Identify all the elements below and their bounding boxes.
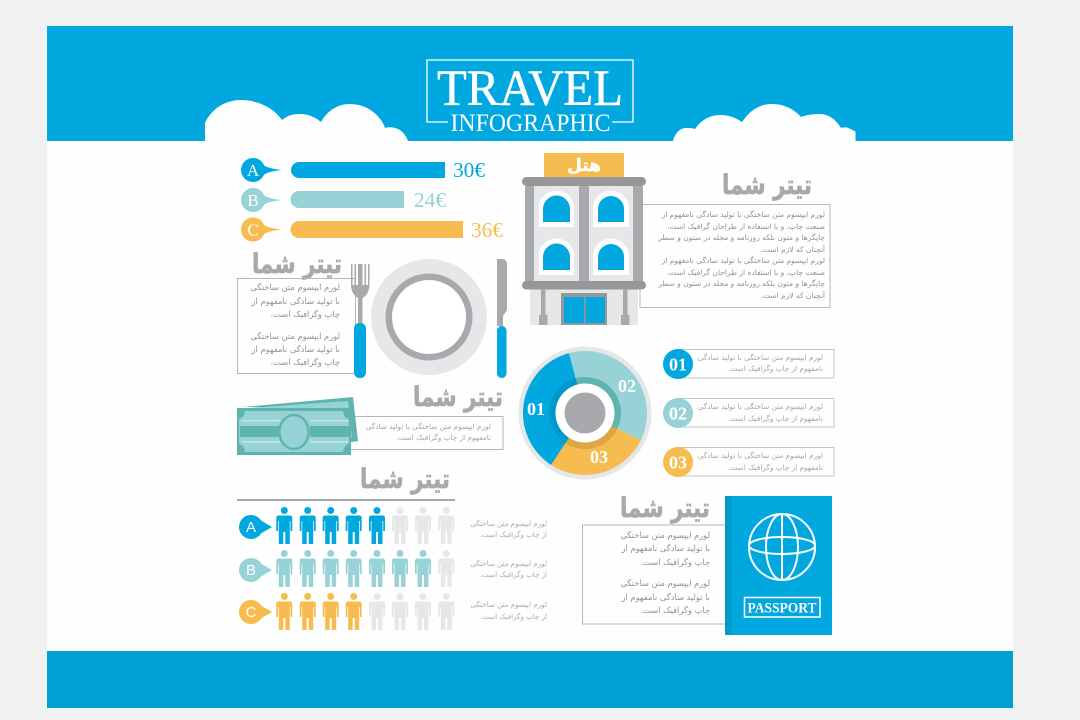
donut chart: [518, 346, 652, 480]
bar chart: prices: [241, 158, 504, 242]
hotel text box: آنچنان که لازم است.: [761, 290, 826, 300]
label 01: 01: [527, 399, 545, 419]
pictogram row B: از چاپ وگرافیک است.: [480, 570, 547, 579]
food text box: با تولید سادگی نامفهوم از: [251, 344, 340, 354]
title block: INFOGRAPHIC: [450, 110, 610, 137]
bar B: B: [247, 191, 259, 210]
pictogram row A: از چاپ وگرافیک است.: [480, 530, 547, 539]
inner ring 02: [576, 377, 621, 429]
food heading: تیتر شما: [252, 249, 342, 280]
passport label: PASSPORT: [748, 600, 816, 616]
bar C: C: [247, 220, 259, 240]
passport text box: لورم ایپسوم متن ساختگی: [620, 530, 710, 540]
segment 01: [523, 353, 585, 465]
icon: hotel building: هتل: [567, 156, 601, 176]
cloud right: [673, 104, 856, 141]
inner ring 01: [549, 378, 585, 443]
food text box: چاپ وگرافیک است.: [270, 309, 340, 319]
inner ring 03: [565, 413, 617, 449]
food text box: [238, 278, 356, 374]
hotel text box: آنچنان که لازم است.: [761, 244, 826, 254]
passport text box: چاپ وگرافیک است.: [640, 557, 710, 567]
pictogram row C: از چاپ وگرافیک است.: [480, 612, 547, 621]
legend item 03: [663, 447, 834, 477]
legend item 01: [663, 349, 834, 379]
pictogram row B: [239, 550, 547, 587]
cloud left: [205, 100, 408, 141]
pictogram row A: لورم ایپسوم متن ساختگی: [470, 519, 547, 528]
food text box: لورم ایپسوم متن ساختگی: [250, 331, 340, 341]
legend item 01: 01: [669, 354, 687, 374]
pictogram row C: [239, 593, 547, 630]
hotel text box: چاپگرها و متون بلکه روزنامه و مجله در ستون و سطر: [657, 279, 825, 288]
hotel text box: لورم ایپسوم متن ساختگی با تولید سادگی نامفهوم از: [661, 256, 825, 265]
bar B: 24€: [414, 188, 447, 212]
people rule: [237, 499, 455, 501]
money text box: لورم ایپسوم متن ساختگی با تولید سادگی: [366, 422, 491, 431]
hotel text box: صنعت چاپ، و با استفاده از طراحان گرافیک است،: [667, 222, 825, 231]
pictogram row A: A: [246, 519, 256, 536]
label 03: 03: [590, 447, 608, 467]
hotel text box: [640, 204, 830, 308]
icon: passport: [725, 496, 832, 635]
icon: plate: [371, 259, 487, 375]
bar C: [241, 218, 504, 242]
pictogram row B: لورم ایپسوم متن ساختگی: [470, 559, 547, 568]
passport text box: چاپ وگرافیک است.: [640, 605, 710, 615]
passport text box: لورم ایپسوم متن ساختگی: [620, 578, 710, 588]
legend item 02: لورم ایپسوم متن ساختگی با تولید سادگی: [698, 402, 823, 411]
donut hub: [556, 384, 614, 442]
bar C: 36€: [471, 218, 504, 242]
pictogram row C: لورم ایپسوم متن ساختگی: [470, 600, 547, 609]
header band: [47, 26, 1013, 141]
footer band: [47, 651, 1013, 708]
food text box: چاپ وگرافیک است.: [270, 357, 340, 367]
food text box: لورم ایپسوم متن ساختگی: [250, 282, 340, 292]
hotel text box: چاپگرها و متون بلکه روزنامه و مجله در ستون و سطر: [657, 233, 825, 242]
globe: [749, 514, 815, 580]
passport text box: با تولید سادگی نامفهوم از: [621, 592, 710, 602]
bar A: [241, 158, 486, 182]
legend item 01: لورم ایپسوم متن ساختگی با تولید سادگی: [698, 353, 823, 362]
icon: banknotes: [237, 397, 358, 455]
bar A: A: [247, 161, 260, 180]
title block: TRAVEL: [437, 61, 623, 117]
segment 03: [551, 413, 641, 475]
passport text box: با تولید سادگی نامفهوم از: [621, 543, 710, 553]
legend item 03: نامفهوم از چاپ وگرافیک است.: [728, 463, 823, 472]
legend item 03: لورم ایپسوم متن ساختگی با تولید سادگی: [698, 451, 823, 460]
pictogram row C: C: [246, 604, 257, 621]
label 02: 02: [618, 376, 636, 396]
hotel text box: صنعت چاپ، و با استفاده از طراحان گرافیک است،: [667, 268, 825, 277]
legend item 02: نامفهوم از چاپ وگرافیک است.: [728, 414, 823, 423]
food text box: با تولید سادگی نامفهوم از: [251, 296, 340, 306]
legend item 01: نامفهوم از چاپ وگرافیک است.: [728, 364, 823, 373]
bar A: 30€: [453, 158, 486, 182]
segment 02: [569, 351, 647, 440]
pictogram row A: [239, 507, 547, 544]
hotel heading: تیتر شما: [722, 170, 812, 201]
money text box: نامفهوم از چاپ وگرافیک است.: [396, 433, 491, 442]
pictogram row B: B: [246, 562, 256, 579]
icon: hotel building: [522, 153, 646, 325]
money text box: [350, 416, 503, 450]
passport heading: تیتر شما: [620, 493, 710, 524]
bar B: [241, 188, 447, 212]
icon: fork: [351, 264, 370, 378]
passport text box: [582, 525, 728, 624]
white body panel: [47, 141, 1013, 651]
money heading: تیتر شما: [413, 382, 503, 413]
title block: [427, 60, 633, 137]
icon: knife: [497, 259, 507, 378]
people heading: تیتر شما: [360, 464, 450, 495]
legend item 03: 03: [669, 452, 687, 472]
hotel text box: لورم ایپسوم متن ساختگی با تولید سادگی نامفهوم از: [661, 210, 825, 219]
legend item 02: 02: [669, 404, 687, 424]
legend item 02: [663, 398, 834, 428]
